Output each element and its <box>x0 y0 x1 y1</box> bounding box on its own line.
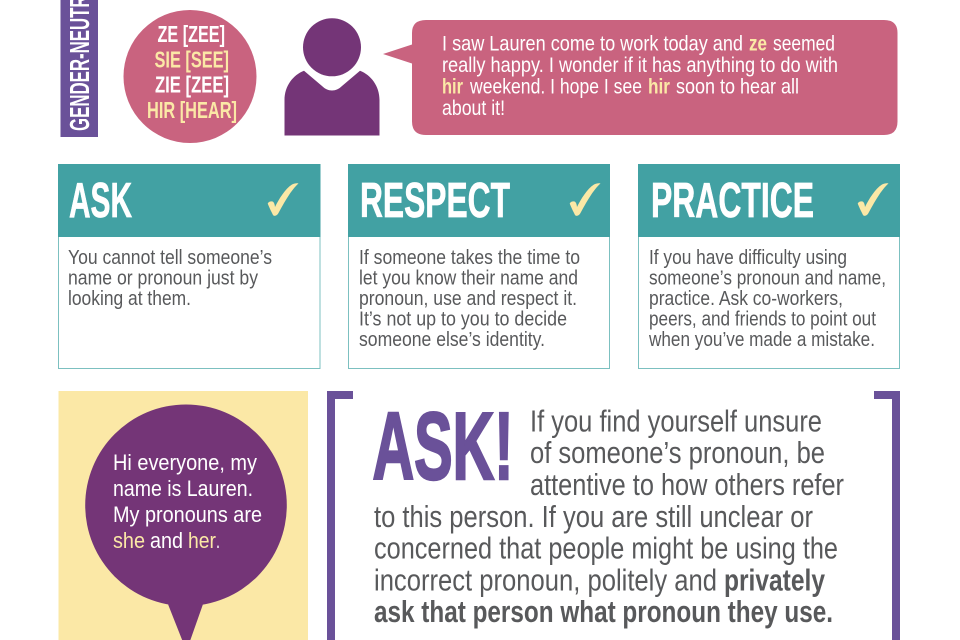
panel: introduction example: and <box>150 528 183 553</box>
panel: respect card: pronoun, use and respect it. <box>359 287 577 310</box>
pronunciation circle: HIR [HEAR] <box>147 97 237 123</box>
panel: ask bracket callout: to this person. If you are still unclear or <box>374 499 813 534</box>
panel: ask bracket callout: of someone’s pronoun, be <box>530 435 825 470</box>
panel: ask bracket callout: If you find yourself unsure <box>530 404 822 438</box>
panel: ask card: looking at them. <box>68 287 191 310</box>
panel: ask card <box>58 164 320 368</box>
pronunciation circle: ZIE [ZEE] <box>155 72 229 98</box>
speech bubble: really happy. I wonder if it has anything to do with <box>442 53 838 77</box>
pronunciation circle: SIE [SEE] <box>154 46 229 72</box>
speech bubble <box>383 20 898 135</box>
panel: introduction example <box>58 391 308 640</box>
speech bubble: hir <box>442 74 463 98</box>
panel: introduction example: My pronouns are <box>113 502 262 527</box>
speech bubble: hir <box>648 74 670 98</box>
speech bubble: seemed <box>773 32 835 56</box>
panel: ask bracket callout <box>327 391 900 640</box>
panel: ask card: ASK <box>69 174 132 228</box>
panel: ask bracket callout: concerned that people might be using the <box>374 530 838 566</box>
panel: practice card <box>638 164 900 368</box>
panel: respect card: It’s not up to you to decide <box>359 308 567 330</box>
panel: practice card: someone’s pronoun and name, <box>649 266 886 290</box>
panel: ask bracket callout: privately <box>724 562 826 598</box>
panel: respect card: RESPECT <box>360 174 510 228</box>
panel: introduction example: Hi everyone, my <box>113 450 258 475</box>
panel: ask bracket callout: attentive to how others refer <box>530 467 844 502</box>
panel: practice card: peers, and friends to point out <box>649 308 876 330</box>
pronunciation circle <box>124 10 256 143</box>
panel: introduction example: her <box>188 528 216 553</box>
panel: respect card <box>348 164 610 368</box>
speech bubble: soon to hear all <box>676 74 799 98</box>
panel: ask card: name or pronoun just by <box>68 266 259 290</box>
panel: introduction example: name is Lauren. <box>113 476 253 501</box>
speech bubble: about it! <box>442 96 505 120</box>
panel: ask bracket callout: ask that person what pronoun they use. <box>374 594 833 629</box>
panel: respect card: let you know their name and <box>359 266 578 290</box>
speech bubble: I saw Lauren come to work today and <box>442 32 743 56</box>
panel: ask bracket callout: ASK! <box>372 393 514 500</box>
panel: respect card: If someone takes the time to <box>359 246 580 269</box>
panel: respect card: someone else’s identity. <box>359 328 545 351</box>
speech bubble: weekend. I hope I see <box>469 74 642 98</box>
icon: person <box>284 18 380 135</box>
panel: practice card: practice. Ask co-workers, <box>649 287 843 310</box>
speech bubble: ze <box>749 32 767 56</box>
panel: ask card: You cannot tell someone’s <box>68 246 272 269</box>
panel: ask bracket callout: incorrect pronoun, politely and <box>374 562 717 598</box>
panel: practice card: when you’ve made a mistake. <box>648 328 875 351</box>
panel: practice card: If you have difficulty using <box>649 246 847 269</box>
panel: introduction example: . <box>216 528 220 553</box>
panel: practice card: PRACTICE <box>651 174 814 228</box>
panel: introduction example: she <box>113 528 145 553</box>
pronunciation circle: ZE [ZEE] <box>158 21 225 47</box>
